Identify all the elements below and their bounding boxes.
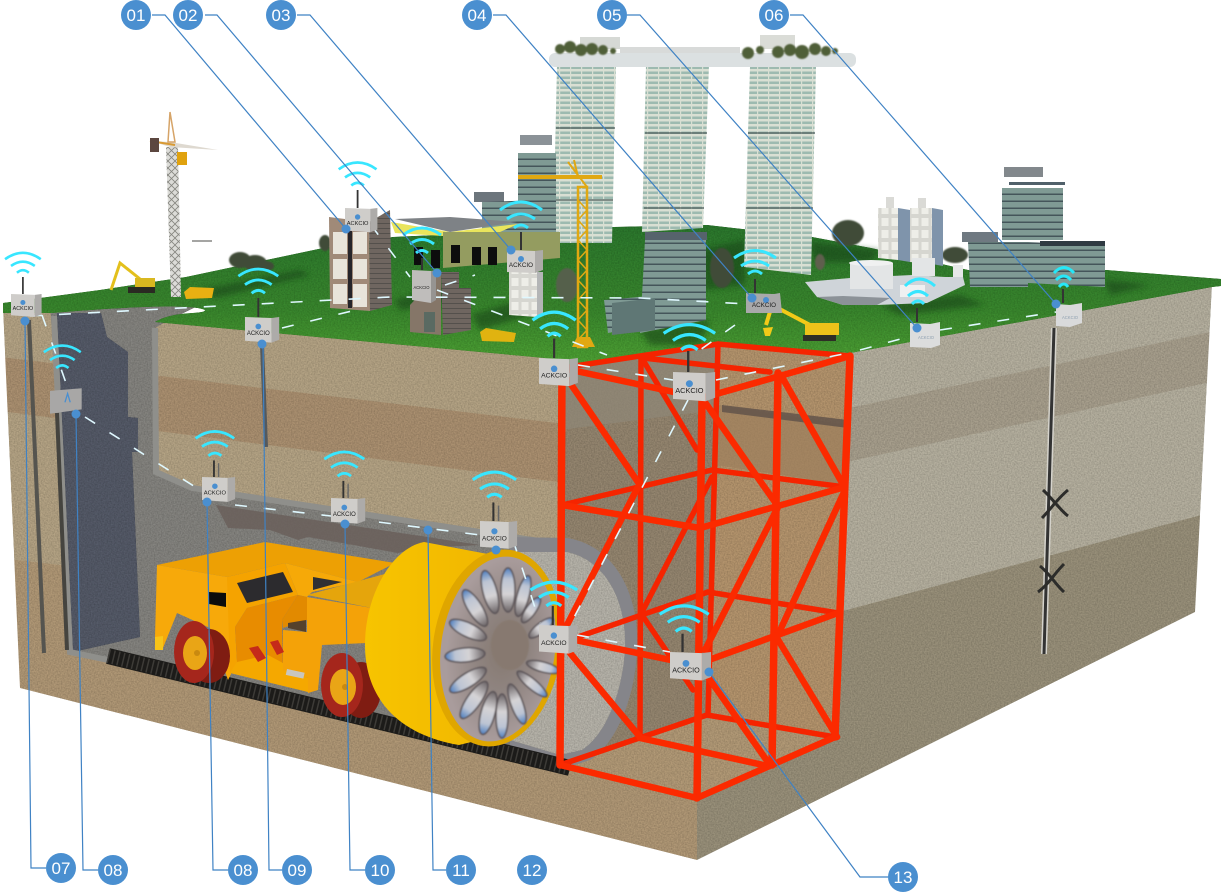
sensor 01: ACKCIO [347,221,369,227]
brick building [329,210,392,311]
tunnel shadow [216,505,480,553]
yellow tower crane [518,160,602,347]
badge 08 left: 08 [104,861,122,880]
badge 06: 06 [765,6,783,25]
sensor 16 [660,606,711,680]
sensor 09: ACKCIO [247,331,270,337]
sensor 08 [44,346,82,414]
white towers [878,197,943,266]
badge 13 [888,862,918,892]
sensor 14 [664,325,715,401]
city buildings [111,35,1105,347]
grass shadows [200,240,1150,345]
cutter petals [444,568,561,738]
badge 03: 03 [272,6,290,25]
sensor 05 [905,279,940,348]
left soil face [0,308,700,860]
sensor 15 [531,582,577,654]
badge 06 [759,0,789,30]
sensor 09 [238,269,279,343]
shrubs and trees [229,220,968,302]
seat and pedals [288,620,306,632]
badge 11: 11 [452,861,470,880]
cutter drum [365,541,574,755]
badge 04 [462,0,492,30]
left extensometer rod [29,320,44,653]
sensor 15: ACKCIO [541,640,567,647]
frame pit walls [560,344,850,798]
badge 07: 07 [52,859,70,878]
right teal buildings [962,167,1105,287]
steel frame, front horizontals and diagonals [560,356,850,798]
badge 01: 01 [127,6,145,25]
badge 08 tunnel [228,855,258,885]
sensor 11: ACKCIO [333,512,356,518]
dome pavilion [805,258,965,305]
teal buildings [604,232,707,335]
sensor 12: ACKCIO [482,536,507,543]
excavated tunnel cavity [50,300,565,772]
stone building [410,272,471,335]
sensor 13 [533,312,578,386]
badge 12: 12 [523,861,541,880]
wireless mesh links [30,225,1056,652]
sensor 02: ACKCIO [413,285,430,290]
sensor 10: ACKCIO [204,490,226,496]
machine body [155,542,395,693]
tunnel opening [510,537,637,770]
shaft wall [57,313,140,652]
badge 02: 02 [179,6,197,25]
sensor boreholes [29,320,1068,654]
towers with skypark [549,35,856,275]
front wheel [174,621,230,683]
badge 08 tunnel: 08 [234,861,252,880]
sensor 02 [403,228,441,303]
rooftop trees [555,41,838,59]
badge 05: 05 [603,6,621,25]
badge 09: 09 [288,861,306,880]
steel frame, front verticals [560,356,850,798]
white building [509,272,543,317]
right soil face [697,285,1220,860]
badge 01 [121,0,151,30]
sensor 01 [339,163,377,232]
badge 10: 10 [371,861,389,880]
badge 04: 04 [468,6,486,25]
yellow station [391,217,560,268]
badge 10 [365,855,395,885]
rear dark buildings [474,135,556,232]
rear wheel [321,653,381,718]
badge 08 left [98,855,128,885]
tunnel boring machine [155,541,574,755]
badge 13: 13 [894,868,912,887]
control panels [237,572,293,603]
sensor 03: ACKCIO [509,262,533,269]
badge 03 [266,0,296,30]
sensor 13: ACKCIO [541,372,567,379]
sensor 03 [500,202,543,273]
sensor 04 [734,250,782,313]
soil block [0,285,1220,860]
sensor 11 [324,452,365,524]
rail track [108,656,570,768]
sensor 07 [5,253,42,317]
badge 11 [446,855,476,885]
badge 09 [282,855,312,885]
badge 05 [597,0,627,30]
badge 02 [173,0,203,30]
concrete lip [54,316,565,660]
sensor 06 [1054,268,1082,327]
callout anchor dots [20,224,1060,676]
vehicles [111,263,839,342]
sensor 12 [473,472,517,549]
right extensometer rod [1038,328,1068,654]
sensor 14: ACKCIO [675,386,704,395]
sensor 04: ACKCIO [752,302,776,309]
white crane [150,112,218,297]
grass surface [3,225,1221,368]
badge 07 [46,853,76,883]
callout number badges [46,0,918,892]
sensor 07: ACKCIO [13,306,33,312]
steel frame, rear members [560,344,850,765]
sensor 05: ACKCIO [918,335,935,340]
sensor 10 [196,431,235,502]
sensor 16: ACKCIO [672,667,700,675]
badge 12 [517,855,547,885]
sensor 06: ACKCIO [1062,315,1079,320]
